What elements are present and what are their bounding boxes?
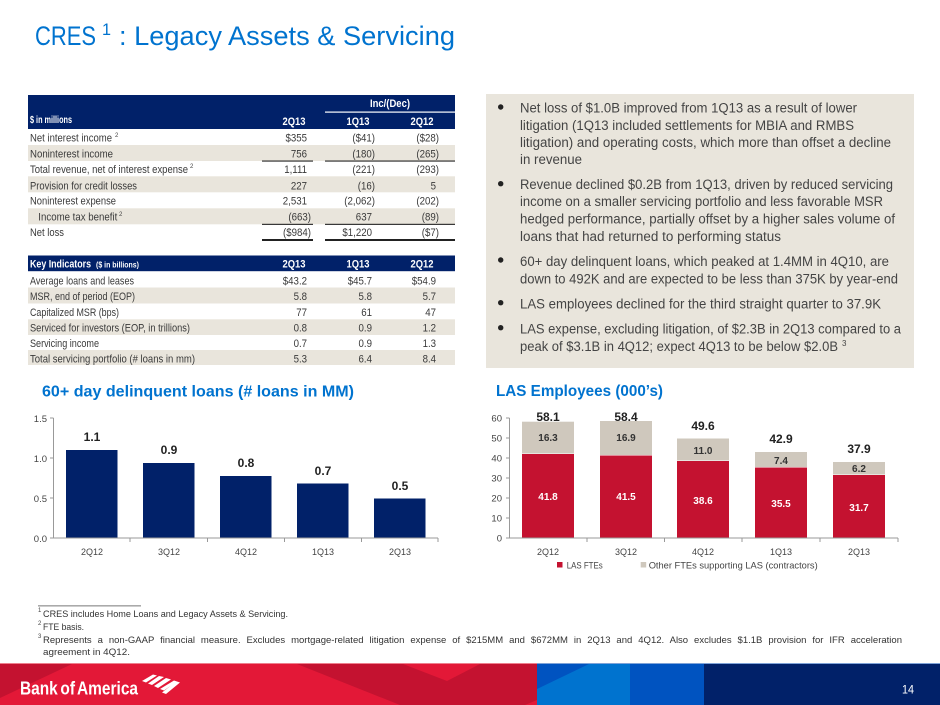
- stacked bar chart: LAS employees: [491, 410, 898, 572]
- bar chart: delinquent loans: 0.0: [34, 534, 47, 545]
- key indicators values: $45.7: [348, 276, 372, 287]
- footnotes: 1: [38, 608, 42, 614]
- bar chart: delinquent loans: 4Q12: [235, 547, 257, 557]
- stacked bar chart: LAS employees: 41.5: [616, 492, 636, 503]
- table values: 1,111: [284, 165, 307, 176]
- footnotes: [38, 606, 902, 658]
- stacked bar chart: LAS employees: 3Q12: [615, 547, 637, 557]
- key indicators row labels: Servicing income: [30, 338, 99, 350]
- key indicators values: 5.8: [359, 292, 372, 303]
- bullet: expense: LAS expense, excluding litigation, of $2.3B in 2Q13 compared to a: [520, 322, 901, 337]
- panel: commentary bullets: [486, 94, 914, 368]
- stacked bar chart: LAS employees: 40: [491, 454, 502, 464]
- key indicators row labels: Average loans and leases: [30, 275, 134, 287]
- stacked bar chart: LAS employees: 16.9: [616, 433, 636, 444]
- bullet: net loss: [498, 101, 891, 167]
- table values: ($7): [422, 228, 439, 239]
- bullet: expense: 3: [842, 339, 847, 348]
- key indicators values: 1.3: [423, 339, 436, 350]
- chart legend: Other FTEs supporting LAS (contractors): [649, 560, 818, 572]
- stacked bar chart: LAS employees: 2Q12: [537, 547, 559, 557]
- heading: LAS employees chart: LAS Employees (000’s): [496, 383, 663, 400]
- table header: Inc/(Dec): [370, 98, 410, 110]
- bullet: expense: [498, 322, 901, 354]
- chart legend: LAS FTEs: [567, 560, 603, 572]
- key indicators row labels: Total servicing portfolio (# loans in mm): [30, 354, 195, 366]
- stacked bar chart: LAS employees: 1Q13: [770, 547, 792, 557]
- table values: (180): [352, 149, 375, 161]
- stacked bar chart: LAS employees: 50: [491, 434, 502, 444]
- table values: 2,531: [283, 196, 307, 207]
- stacked bar chart: LAS employees: 41.8: [538, 492, 558, 503]
- bullet: employees: LAS employees declined for the third straight quarter to 37.9K: [520, 297, 881, 312]
- table values: (293): [416, 165, 439, 176]
- key indicators values: 0.7: [294, 339, 307, 350]
- table header: 2Q12: [410, 116, 434, 128]
- stacked bar chart: LAS employees: 2Q13: [848, 547, 870, 557]
- table values: 756: [291, 149, 307, 161]
- key indicators values: 0.9: [359, 323, 372, 334]
- bullet: revenue: loans that had returned to performing status: [520, 229, 781, 244]
- stacked bar chart: LAS employees: 37.9: [847, 442, 871, 456]
- key indicators header: Key Indicators: [30, 259, 91, 271]
- key indicators header: 2Q13: [282, 259, 306, 271]
- bar chart: delinquent loans: [34, 414, 438, 557]
- table values: [283, 133, 439, 239]
- bar chart: delinquent loans: 2Q13: [389, 547, 411, 557]
- key indicators values: 0.8: [294, 323, 307, 334]
- chart legend: [557, 560, 818, 572]
- table values: (663): [288, 212, 311, 224]
- stacked bar chart: LAS employees: 4Q12: [692, 547, 714, 557]
- key indicators row shading: [28, 288, 455, 365]
- table values: (89): [422, 212, 439, 224]
- bullet: net loss: in revenue: [520, 152, 582, 167]
- table values: ($41): [352, 133, 375, 145]
- key indicators row labels: Serviced for investors (EOP, in trillions): [30, 322, 190, 334]
- bullet: delinquent loans: down to 492K and are expected to be less than 375K by year-end: [520, 272, 898, 287]
- footnotes: agreement in 4Q12.: [43, 647, 130, 658]
- table header: $ in millions: [30, 115, 72, 126]
- stacked bar chart: LAS employees: 6.2: [852, 464, 866, 475]
- stacked bar chart: LAS employees: 38.6: [693, 496, 713, 507]
- table row labels: 2: [190, 164, 194, 170]
- key indicators values: 47: [425, 308, 436, 319]
- footnotes: Represents a non-GAAP financial measure. Excludes mortgage-related litigation expense of $215MM and $672MM in 2Q13 and 4Q12. Also excludes $1.1B provision for IFR acceleration: [43, 635, 902, 646]
- key indicators values: $43.2: [283, 276, 307, 287]
- stacked bar chart: LAS employees: 58.4: [614, 410, 638, 424]
- table values: 227: [291, 181, 307, 192]
- key indicators values: $54.9: [412, 276, 436, 287]
- bar chart: delinquent loans: 0.5: [34, 494, 47, 505]
- key indicators values: 5.8: [294, 292, 307, 303]
- stacked bar chart: LAS employees: 30: [491, 474, 502, 484]
- table row shading: [28, 145, 455, 224]
- footnotes: FTE basis.: [43, 622, 84, 633]
- key indicators values: 6.4: [359, 354, 372, 366]
- table row labels: Income tax benefit: [38, 212, 117, 224]
- stacked bar chart: LAS employees: 49.6: [691, 419, 715, 433]
- bullet: net loss: litigation) and operating costs, which more than offset a decline: [520, 135, 891, 150]
- bar chart: delinquent loans: 3Q12: [158, 547, 180, 557]
- key indicators row labels: Capitalized MSR (bps): [30, 307, 119, 319]
- bar chart: delinquent loans: 0.5: [392, 479, 409, 493]
- key indicators row labels: [30, 275, 195, 366]
- table row labels: Provision for credit losses: [30, 180, 137, 192]
- table row labels: 2: [119, 212, 123, 218]
- key indicators values: 5.3: [294, 354, 307, 366]
- table subtotal rules: [262, 160, 455, 241]
- bullet: revenue: [498, 177, 895, 244]
- table row labels: Total revenue, net of interest expense: [30, 164, 188, 176]
- panel: key indicators table: [28, 256, 455, 366]
- footnotes: 2: [38, 621, 42, 627]
- key indicators header: ($ in billions): [96, 260, 139, 270]
- stacked bar chart: LAS employees: 11.0: [694, 446, 713, 457]
- bar chart: delinquent loans: 1Q13: [312, 547, 334, 557]
- stacked bar chart: LAS employees: 7.4: [774, 456, 788, 467]
- bullet: revenue: income on a smaller servicing portfolio and less favorable MSR: [520, 194, 883, 209]
- table values: $1,220: [342, 228, 372, 239]
- table values: (265): [416, 149, 439, 161]
- page number: 14: [902, 682, 914, 696]
- key indicators values: 61: [361, 308, 372, 319]
- logo: Bank of America: Bank of America: [20, 678, 139, 698]
- key indicators values: 1.2: [423, 323, 436, 334]
- key indicators values: 0.9: [359, 339, 372, 350]
- table row labels: 2: [115, 133, 119, 139]
- title: CRES: [35, 21, 96, 51]
- bar chart: delinquent loans: 0.7: [315, 464, 332, 478]
- table values: 5: [431, 181, 436, 192]
- key indicators header: 1Q13: [346, 259, 370, 271]
- key indicators values: 5.7: [423, 292, 436, 303]
- stacked bar chart: LAS employees: 0: [497, 534, 502, 544]
- table values: (16): [358, 181, 375, 192]
- bullet: revenue: Revenue declined $0.2B from 1Q13, driven by reduced servicing: [520, 177, 893, 192]
- bar chart: delinquent loans: 0.8: [238, 456, 255, 470]
- table header: 2Q13: [282, 116, 306, 128]
- footnotes: CRES includes Home Loans and Legacy Assets & Servicing.: [43, 609, 288, 620]
- stacked bar chart: LAS employees: 16.3: [538, 433, 558, 444]
- bullet: net loss: litigation (1Q13 included settlements for MBIA and RMBS: [520, 118, 854, 133]
- bullet: net loss: Net loss of $1.0B improved from 1Q13 as a result of lower: [520, 101, 857, 116]
- table values: (221): [352, 165, 375, 176]
- table values: (202): [416, 196, 439, 207]
- table values: $355: [286, 133, 307, 145]
- stacked bar chart: LAS employees: 20: [491, 494, 502, 504]
- stacked bar chart: LAS employees: 35.5: [771, 499, 791, 510]
- table header: 1Q13: [346, 116, 370, 128]
- bar chart: delinquent loans: 0.9: [161, 443, 178, 457]
- bullet: expense: peak of $3.1B in 4Q12; expect 4Q13 to be below $2.0B: [520, 339, 838, 354]
- table row labels: Net interest income: [30, 133, 112, 145]
- panel: financial summary table: [28, 95, 455, 241]
- stacked bar chart: LAS employees: 60: [491, 414, 502, 424]
- icon: flag mark: [142, 674, 180, 694]
- title: : Legacy Assets & Servicing: [119, 21, 455, 51]
- table values: (2,062): [344, 196, 375, 207]
- stacked bar chart: LAS employees: 10: [491, 514, 502, 524]
- heading: delinquent loans chart: 60+ day delinquent loans (# loans in MM): [42, 384, 354, 400]
- key indicators values: 77: [296, 308, 307, 319]
- table values: 637: [356, 212, 372, 224]
- stacked bar chart: LAS employees: 58.1: [536, 410, 560, 424]
- table row labels: Noninterest income: [30, 149, 113, 161]
- key indicators header: 2Q12: [410, 259, 434, 271]
- stacked bar chart: LAS employees: 31.7: [849, 503, 869, 514]
- stacked bar chart: LAS employees: 42.9: [769, 432, 793, 446]
- key indicators row labels: MSR, end of period (EOP): [30, 291, 135, 303]
- bar chart: delinquent loans: 1.0: [34, 454, 47, 465]
- key indicators values: 8.4: [423, 354, 436, 366]
- bar chart: delinquent loans: 1.1: [84, 430, 101, 444]
- key indicators values: [283, 276, 436, 366]
- table row labels: [30, 133, 194, 239]
- table values: ($984): [283, 228, 311, 239]
- table row labels: Net loss: [30, 227, 64, 239]
- table row labels: Noninterest expense: [30, 195, 116, 207]
- bullet: delinquent loans: 60+ day delinquent loans, which peaked at 1.4MM in 4Q10, are: [520, 254, 889, 269]
- table header: [28, 95, 455, 129]
- bar chart: delinquent loans: 2Q12: [81, 547, 103, 557]
- footnotes: 3: [38, 634, 42, 640]
- bar chart: delinquent loans: 1.5: [34, 414, 47, 425]
- title: 1: [102, 20, 111, 39]
- footer band: [0, 663, 940, 705]
- bullet: delinquent loans: [498, 254, 898, 287]
- table values: ($28): [416, 133, 439, 145]
- bullet: revenue: hedged performance, partially offset by a higher sales volume of: [520, 212, 895, 226]
- key indicators header: [28, 256, 455, 271]
